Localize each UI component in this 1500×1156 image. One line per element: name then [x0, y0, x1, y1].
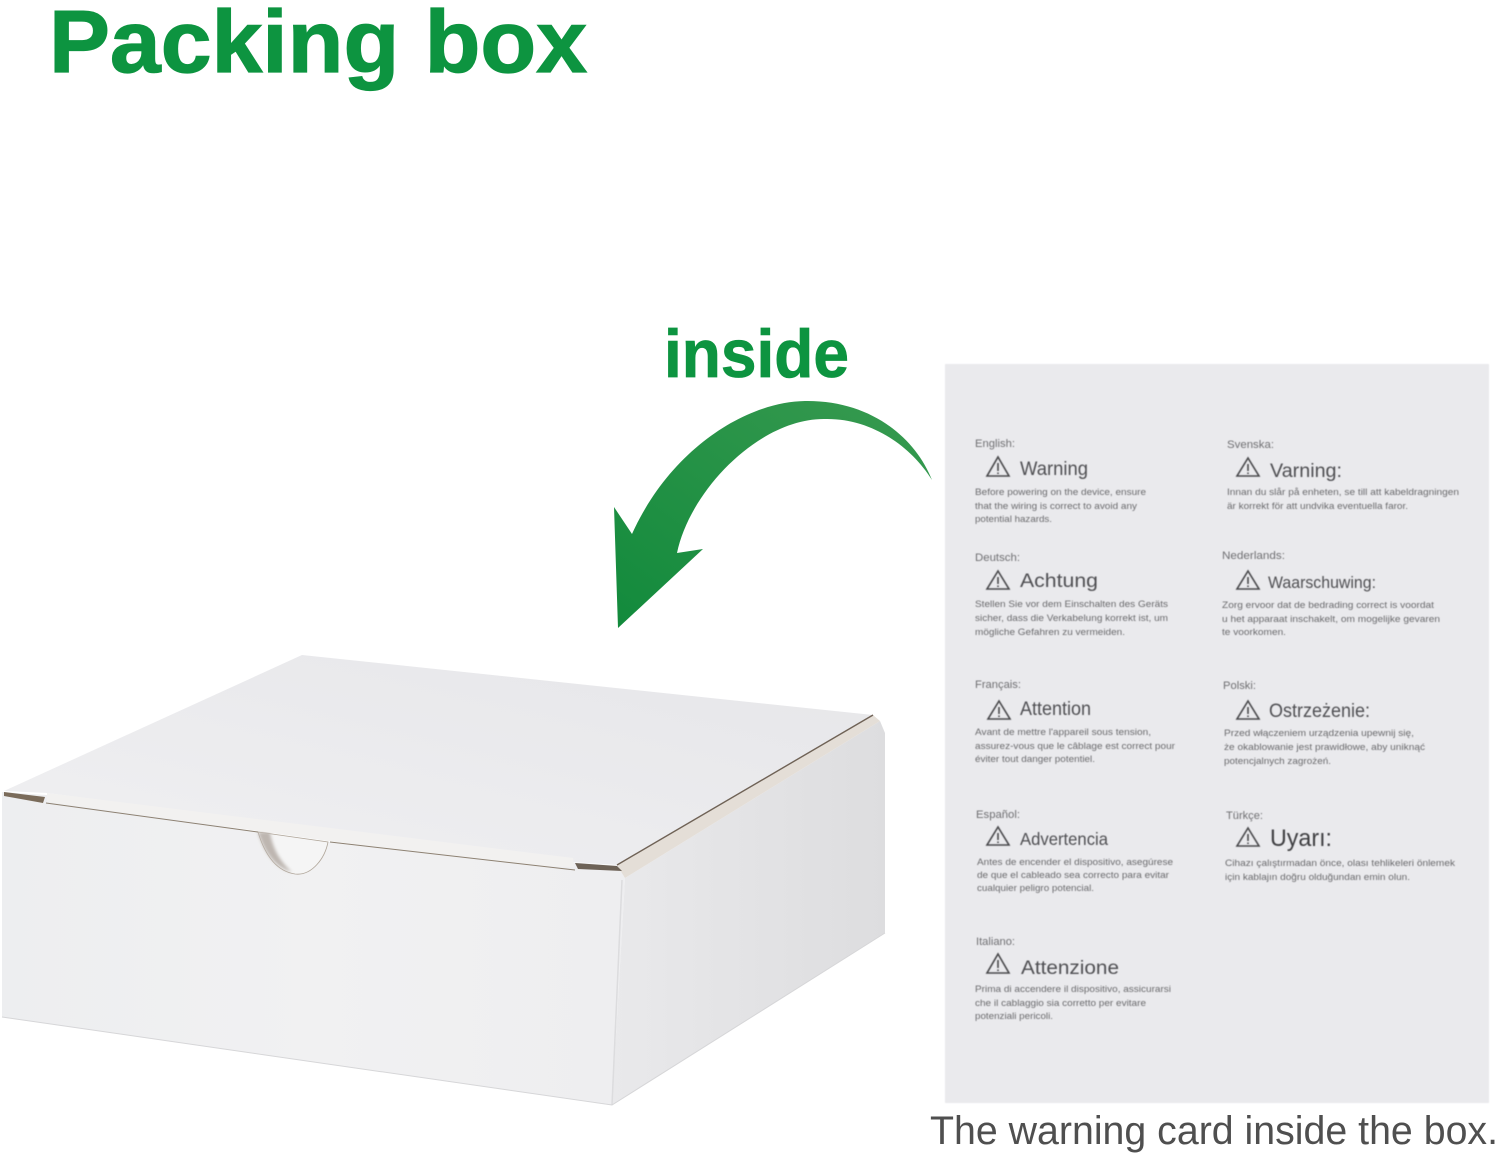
- warning: Français: Avant de mettre l'appareil sous tension,: [975, 727, 1151, 738]
- box notch hollow: [258, 832, 328, 874]
- box lid: [4, 655, 873, 865]
- box front top edge: [46, 803, 575, 870]
- box right face: [612, 721, 885, 1105]
- warning: English: [975, 438, 1146, 525]
- warning: Español: Antes de encender el dispositivo, asegúrese: [977, 857, 1173, 868]
- warning: Svenska: Varning:: [1270, 461, 1342, 482]
- warning: English: potential hazards.: [975, 514, 1052, 525]
- warning: Deutsch: sicher, dass die Verkabelung korrekt ist, um: [975, 613, 1168, 624]
- warning: Français: Attention: [1020, 699, 1091, 720]
- warning: Deutsch: Achtung: [1020, 571, 1098, 592]
- warning: Nederlands: te voorkomen.: [1222, 627, 1286, 638]
- warning: Nederlands: Nederlands:: [1222, 550, 1285, 562]
- warning: Italiano: che il cablaggio sia corretto per evitare: [975, 998, 1146, 1009]
- warning: Türkçe: Cihazı çalıştırmadan önce, olası tehlikeleri önlemek: [1225, 858, 1455, 869]
- label: inside: inside: [664, 316, 849, 392]
- warning: Svenska: [1227, 439, 1459, 512]
- icon: warning triangle: [1237, 828, 1259, 846]
- warning: Español: cualquier peligro potencial.: [977, 883, 1094, 894]
- warning: Svenska: Innan du slår på enheten, se till att kabeldragningen: [1227, 487, 1459, 498]
- warning: Deutsch: Stellen Sie vor dem Einschalten des Geräts: [975, 599, 1168, 610]
- warning: Español: [976, 809, 1173, 894]
- warning: Svenska: Svenska:: [1227, 439, 1274, 451]
- warning: Polski: że okablowanie jest prawidłowe, aby uniknąć: [1224, 742, 1425, 753]
- warning: Nederlands: Zorg ervoor dat de bedrading correct is voordat: [1222, 600, 1434, 611]
- warning: Türkçe: [1225, 810, 1455, 883]
- warning: English: Before powering on the device, ensure: [975, 487, 1146, 498]
- warning: Polski: Przed włączeniem urządzenia upewnij się,: [1224, 728, 1414, 739]
- warning: English: English:: [975, 438, 1015, 450]
- warning: Français: [975, 679, 1176, 765]
- box front-right fold: [612, 880, 622, 1105]
- warning: Deutsch: [975, 552, 1168, 638]
- panel: warning card: [945, 364, 1489, 1103]
- warning: English: Warning: [1020, 459, 1088, 480]
- warning: Türkçe: Türkçe:: [1226, 810, 1263, 822]
- warning: Polski: Ostrzeżenie:: [1269, 701, 1370, 722]
- box right flap corner: [575, 863, 622, 871]
- warning: Français: assurez-vous que le câblage est correct pour: [975, 741, 1176, 752]
- warning: Polski: [1223, 680, 1425, 767]
- illustration: white cardboard box: [2, 655, 885, 1105]
- box front face: [2, 792, 625, 1105]
- icon: warning triangle: [988, 701, 1010, 719]
- warning: Italiano: Prima di accendere il dispositivo, assicurarsi: [975, 984, 1171, 995]
- icon: warning triangle: [1237, 571, 1259, 589]
- warning: Türkçe: Uyarı:: [1270, 825, 1332, 852]
- warning: Español: de que el cableado sea correcto para evitar: [977, 870, 1170, 881]
- box left flap corner: [4, 792, 45, 803]
- card background: [945, 364, 1489, 1103]
- warning: Français: éviter tout danger potentiel.: [975, 754, 1095, 765]
- warning: Español: Advertencia: [1020, 829, 1108, 849]
- icon: warning triangle: [987, 827, 1009, 845]
- caption: The warning card inside the box.: [930, 1109, 1498, 1153]
- warning: Deutsch: mögliche Gefahren zu vermeiden.: [975, 627, 1125, 638]
- box bottom edge: [2, 933, 885, 1105]
- arrow: curved arrow pointing into the box: [614, 401, 932, 628]
- icon: warning triangle: [987, 954, 1009, 973]
- icon: warning triangle: [1237, 458, 1259, 476]
- box lid lip: [47, 793, 574, 867]
- box corrugated band under the lid: [617, 715, 880, 878]
- warning: Nederlands: u het apparaat inschakelt, om mogelijke gevaren: [1222, 614, 1440, 625]
- warning: Svenska: är korrekt för att undvika eventuella faror.: [1227, 501, 1408, 512]
- warning: Italiano: Italiano:: [976, 936, 1015, 948]
- warning: Italiano: [975, 936, 1171, 1022]
- warning: Deutsch: Deutsch:: [975, 552, 1020, 564]
- warning: English: that the wiring is correct to avoid any: [975, 501, 1137, 512]
- warning: Español: Español:: [976, 809, 1020, 821]
- warning: Polski: potencjalnych zagrożeń.: [1224, 756, 1331, 767]
- warning: Polski: Polski:: [1223, 680, 1256, 692]
- icon: warning triangle: [987, 571, 1009, 589]
- icon: warning triangle: [1237, 701, 1259, 719]
- box lid edge right: [617, 715, 873, 865]
- icon: warning triangle: [987, 457, 1009, 476]
- warning: Italiano: potenziali pericoli.: [975, 1011, 1053, 1022]
- warning: Nederlands: [1222, 550, 1440, 638]
- warning: Nederlands: Waarschuwing:: [1268, 573, 1376, 592]
- box notch shadow: [258, 832, 292, 872]
- warning: Italiano: Attenzione: [1021, 958, 1119, 979]
- warning: Français: Français:: [975, 679, 1021, 691]
- warning: Türkçe: için kablajın doğru olduğundan emin olun.: [1225, 872, 1410, 883]
